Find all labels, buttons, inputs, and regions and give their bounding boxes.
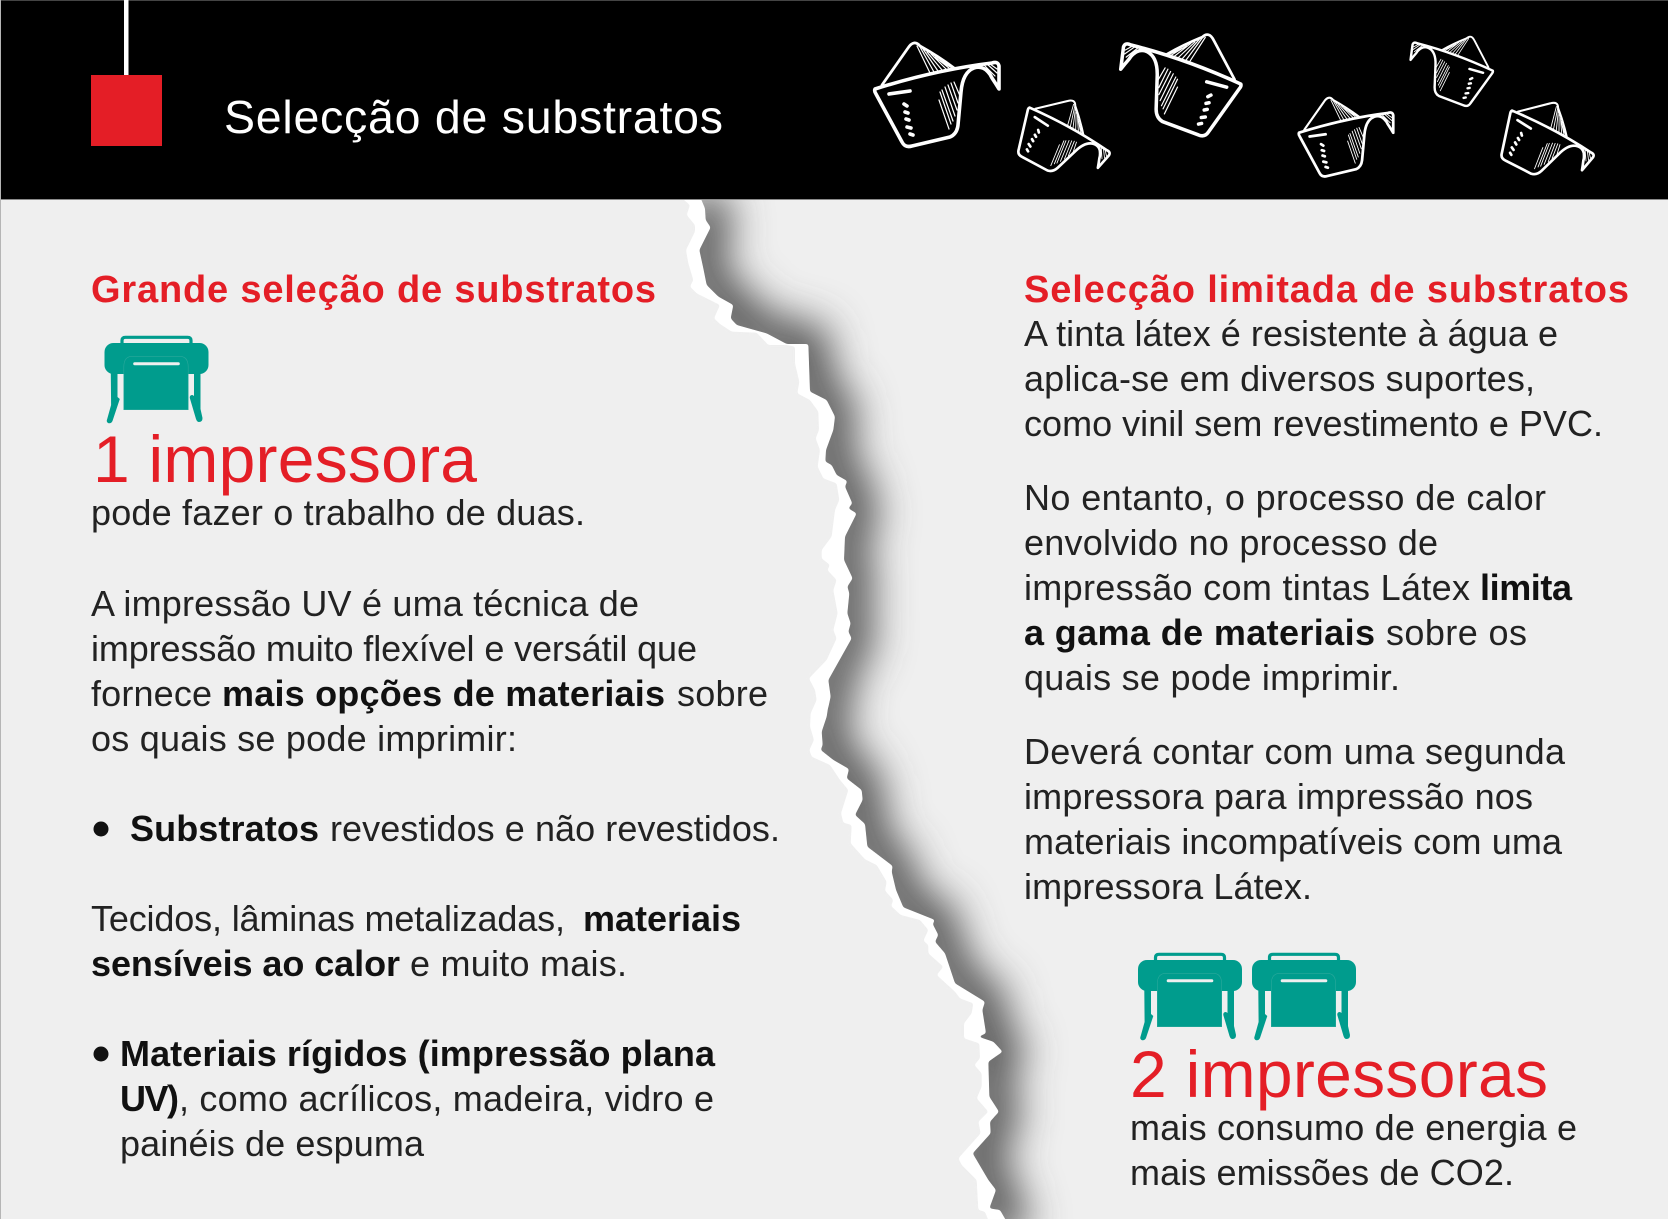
paragraph: second printer: impressora para impressão nos [1024, 776, 1533, 817]
paragraph: latex ink [1024, 313, 1603, 444]
paragraph: fabrics and heat-sensitive materials: sensíveis ao calor [91, 943, 400, 984]
paragraph: second printer: impressora Látex. [1024, 866, 1312, 907]
caption: two printers [1130, 1107, 1577, 1193]
bullet: rigid materials: , como acrílicos, madeira, vidro e [179, 1078, 714, 1119]
paragraph: UV printing: A impressão UV é uma técnica de [91, 583, 639, 624]
paragraph: fabrics and heat-sensitive materials: Tecidos, lâminas metalizadas, [91, 898, 565, 939]
paragraph: latex ink: aplica-se em diversos suportes, [1024, 358, 1535, 399]
paragraph: UV printing: os quais se pode imprimir: [91, 718, 517, 759]
paragraph: latex ink: como vinil sem revestimento e PVC. [1024, 403, 1603, 444]
paragraph: UV printing: sobre [677, 673, 768, 714]
paragraph: fabrics and heat-sensitive materials: e muito mais. [410, 943, 627, 984]
bullet: rigid materials: Materiais rígidos (impressão plana [120, 1033, 716, 1074]
paragraph: heat process: envolvido no processo de [1024, 522, 1438, 563]
caption: two printers: mais consumo de energia e [1130, 1107, 1577, 1148]
paragraph: heat process: limita [1480, 567, 1573, 608]
bullet: rigid materials: painéis de espuma [120, 1123, 425, 1164]
icon: one printer [104, 337, 208, 423]
paragraph: UV printing [91, 583, 768, 759]
paragraph: heat process: No entanto, o processo de calor [1024, 477, 1546, 518]
paragraph: heat process: a gama de materiais [1024, 612, 1375, 653]
bullet: rigid materials [94, 1033, 716, 1164]
left heading: Grande seleção de substratos [91, 269, 656, 311]
big number: 2 impressoras: 2 impressoras [1130, 1037, 1548, 1111]
bullet: coated and uncoated substrates: revestidos e não revestidos. [330, 808, 780, 849]
torn paper edge with shadow [0, 197, 1013, 1219]
icons: measuring cups [875, 25, 1604, 203]
paragraph: heat process: impressão com tintas Látex [1024, 567, 1470, 608]
panel: right column [1024, 269, 1629, 1193]
paragraph: heat process [1024, 477, 1573, 698]
bullet: coated and uncoated substrates: Substratos [130, 808, 319, 849]
big number: 1 impressora: 1 impressora [93, 422, 477, 496]
left page edge [0, 0, 1, 1219]
caption: two printers: mais emissões de CO2. [1130, 1152, 1514, 1193]
paragraph: heat process: quais se pode imprimir. [1024, 657, 1400, 698]
bullet: rigid materials: UV) [120, 1078, 179, 1119]
bullet: coated and uncoated substrates [94, 808, 780, 849]
right heading: Selecção limitada de substratos [1024, 269, 1629, 311]
paragraph: fabrics and heat-sensitive materials: materiais [583, 898, 741, 939]
paragraph: second printer [1024, 731, 1566, 907]
paragraph: UV printing: fornece [91, 673, 212, 714]
paragraph: second printer: materiais incompatíveis com uma [1024, 821, 1563, 862]
paragraph: UV printing: impressão muito flexível e versátil que [91, 628, 697, 669]
header band [0, 0, 1668, 200]
paragraph: second printer: Deverá contar com uma segunda [1024, 731, 1566, 772]
icon: red hanging square [91, 0, 162, 146]
paragraph: UV printing: mais opções de materiais [222, 673, 665, 714]
caption: one printer: pode fazer o trabalho de duas. [91, 492, 585, 533]
paragraph: fabrics and heat-sensitive materials [91, 898, 741, 984]
paragraph: heat process: sobre os [1386, 612, 1527, 653]
paragraph: latex ink: A tinta látex é resistente à água e [1024, 313, 1558, 354]
title: Selecção de substratos [224, 91, 723, 143]
panel: left column [91, 269, 780, 1164]
icon: two printers [1138, 954, 1356, 1040]
